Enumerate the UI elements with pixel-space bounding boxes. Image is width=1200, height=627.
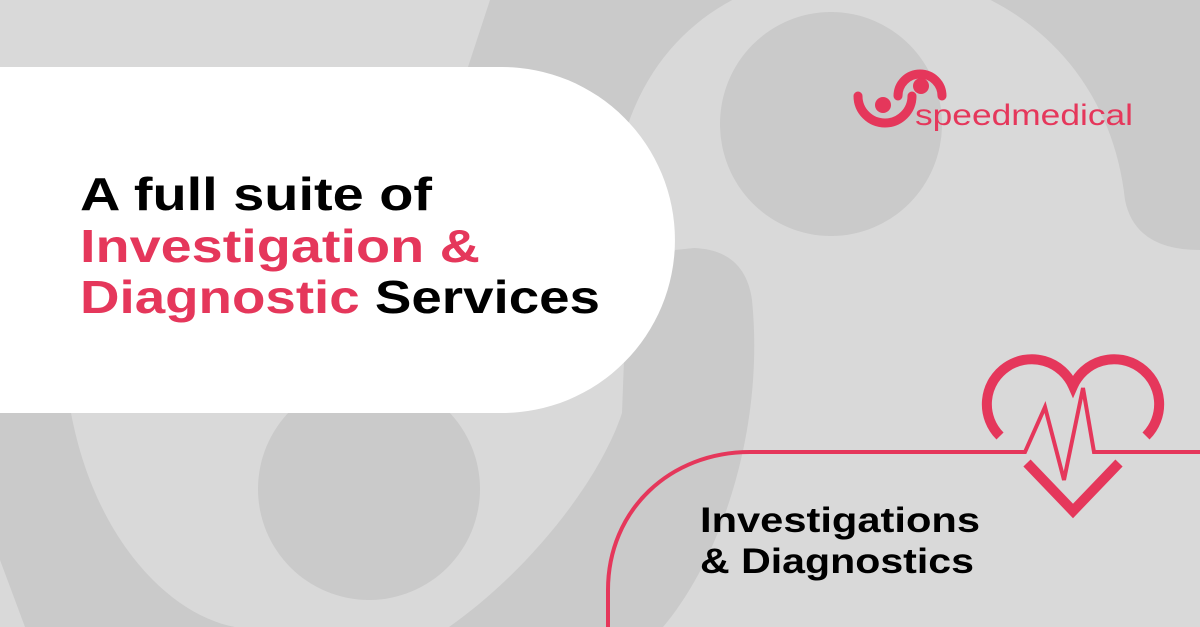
pink line with ECG [608,388,1200,627]
title: A full suite of [80,168,433,220]
white title panel [0,67,675,413]
icon: heart [987,359,1159,511]
subtitle [700,501,980,581]
title: Investigation & [80,220,480,272]
title: Diagnostic Services [80,271,600,323]
logo: speedmedical [858,74,1133,132]
subtitle: & Diagnostics [700,542,974,581]
logo: speedmedical: speedmedical [915,99,1133,132]
subtitle: Investigations [700,501,980,540]
title [80,168,600,323]
